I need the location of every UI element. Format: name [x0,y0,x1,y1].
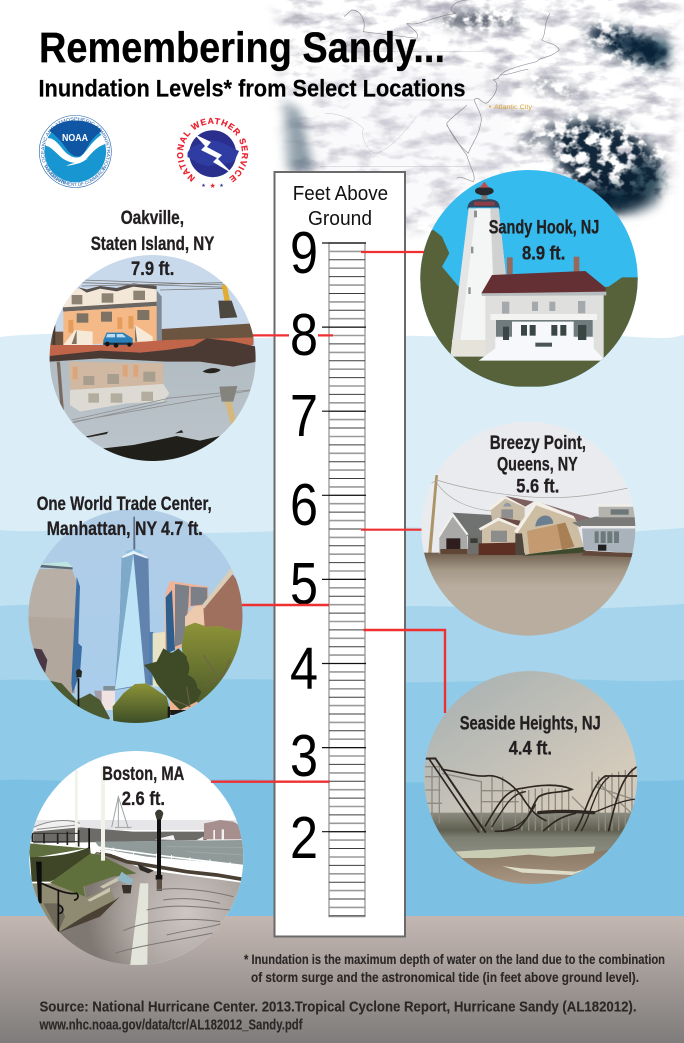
lawn and walls [27,843,137,933]
label: One World Trade Center [37,493,212,540]
left building [27,562,82,693]
label: Sandy Hook: Sandy Hook, NJ [489,216,599,238]
benches [117,864,154,893]
connector: Breezy Point [361,529,422,531]
source: www.nhc.noaa.gov/data/tcr/AL182012_Sandy.pdf [39,1016,303,1034]
car [103,333,133,348]
panel: One World Trade Center illustration [23,507,250,727]
gauge numerals: 4 [290,636,318,702]
gauge heading [293,183,388,230]
keeper's house [479,257,606,361]
gauge numerals: 3 [290,723,318,789]
logo: NOAA: NOAA [62,133,88,144]
label: Oakville: Oakville, [121,207,184,229]
satellite image of Hurricane Sandy [271,0,684,236]
gauge numerals: 5 [290,551,318,617]
label: Seaside Heights [460,712,601,759]
panel: Oakville illustration [47,253,260,470]
center house [479,496,534,555]
label: Boston: Boston, MA [102,763,184,785]
gauge numerals: 8 [290,302,318,368]
gauge heading: Feet Above [293,183,388,205]
logo: NOAA: NATIONAL OCEANIC AND ATMOSPHERIC ADMINISTRATION [41,117,110,184]
Atlantic City marker: Atlantic City [494,105,532,111]
label: Breezy Point: Breezy Point, [490,432,586,454]
label: Breezy Point: 5.6 ft. [516,475,559,497]
label: Seaside Heights: Seaside Heights, NJ [460,712,601,734]
label: Sandy Hook: 8.9 ft. [522,242,565,264]
water [47,358,260,465]
building [63,283,162,345]
gauge numerals: 6 [290,472,318,538]
trees [47,623,246,727]
wires [82,280,227,290]
wrecked coaster track [425,758,637,832]
logo: National Weather Service: NATIONAL WEATHER SERVICE [177,118,248,182]
trestle [425,767,635,831]
excavator [218,285,237,318]
label: Sandy Hook [489,216,599,264]
logo: National Weather Service: ★ [219,183,224,189]
reflection [57,362,250,427]
source [39,999,637,1034]
label: Boston: 2.6 ft. [122,788,165,810]
footnote [244,951,665,985]
logo: NOAA: U.S. DEPARTMENT OF COMMERCE [44,164,106,186]
lamp post [76,669,82,707]
label: Oakville [91,207,214,280]
white path stripe [130,883,148,967]
panel: Sandy Hook illustration [415,167,645,387]
debris in water [85,368,221,437]
coastlines and state borders [320,0,559,182]
lamp posts and fences [32,810,163,932]
label: One World Trade Center: One World Trade Center, [37,493,212,515]
neighbouring buildings [94,567,245,715]
panel: gauge board [274,172,405,936]
connector: Oakville [253,334,333,336]
grey house [438,513,495,554]
gauge numerals: 9 [290,220,318,286]
connector: Seaside Heights [364,630,445,713]
label: Breezy Point [490,432,586,497]
panel: Boston illustration [23,747,250,970]
gauge numerals: 2 [290,805,318,871]
connector: One World Trade Center [242,604,329,606]
label: Oakville: Staten Island, NY [91,233,214,255]
gauge numerals [290,220,318,871]
gauge numerals: 7 [290,383,318,449]
label: Seaside Heights: 4.4 ft. [509,737,552,759]
lighthouse [450,182,506,357]
logo: National Weather Service: ★ [201,183,206,189]
One WTC tower [115,517,153,690]
subtitle: Inundation Levels* from Select Locations [38,76,466,103]
label: Boston [102,763,184,810]
skyline [33,797,243,865]
panel: Seaside Heights illustration [419,667,642,890]
panel: Breezy Point illustration [415,417,642,639]
ripples on wet path [115,889,233,953]
railing [90,846,247,873]
right house [572,504,637,557]
connector: Boston [211,781,330,783]
gauge heading: Ground [308,208,372,230]
tilted house [514,501,592,556]
waterfront path [43,852,247,970]
label: Breezy Point: Queens, NY [497,454,578,476]
flagpoles [75,770,78,847]
connector: Sandy Hook [361,251,424,253]
label: One World Trade Center: Manhattan, NY 4.7 ft. [47,518,203,540]
label: Oakville: 7.9 ft. [131,258,174,280]
ruler scale [322,243,366,916]
title: Remembering Sandy... [39,24,445,72]
logo: National Weather Service: ★ [209,182,216,190]
